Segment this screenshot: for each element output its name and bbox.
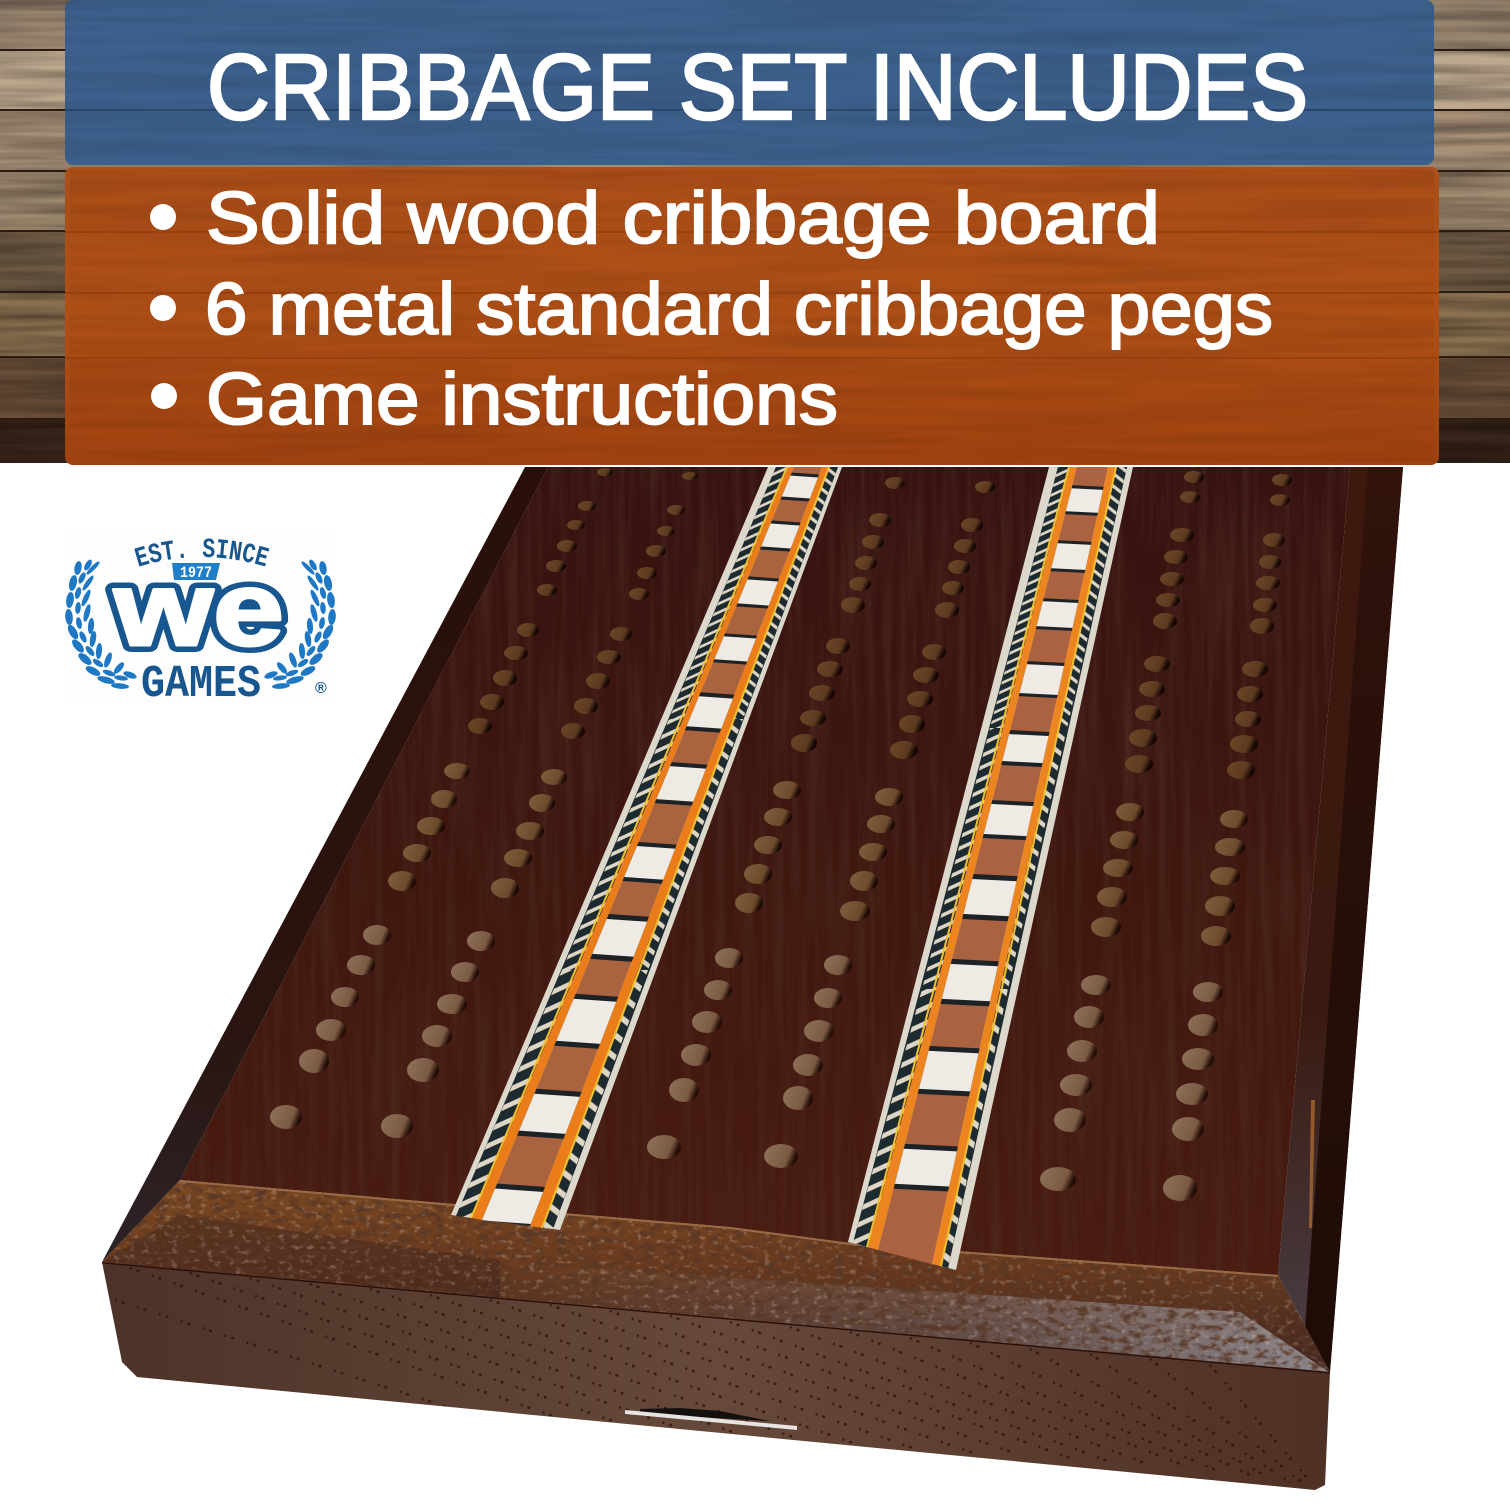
board: card slot on front face — [625, 1408, 797, 1430]
logo: laurel wreath — [65, 558, 336, 690]
board: top surface — [170, 467, 1360, 1282]
logo: we wordmark: we — [113, 551, 284, 668]
panel: orange contents list — [65, 167, 1439, 465]
list item: metal pegs: 6 metal standard cribbage pegs — [205, 269, 1273, 350]
logo: est. since arc text — [134, 538, 270, 566]
logo: est. since arc text: EST. SINCE — [134, 538, 270, 566]
cribbage board — [100, 467, 1403, 1492]
board: peg holes — [270, 468, 1292, 1201]
logo: WE Games — [65, 538, 336, 710]
background: wood planks — [0, 0, 1510, 463]
list item: game instructions: Game instructions — [206, 359, 838, 440]
logo: 1977 ribbon: 1977 — [180, 564, 212, 582]
logo: registered mark: ® — [315, 680, 327, 697]
panel: blue title banner — [65, 0, 1434, 165]
board: left inlay strip — [451, 466, 842, 1230]
board: left bevel — [102, 467, 548, 1262]
logo: games wordmark: GAMES — [141, 659, 261, 710]
board: front face — [100, 1260, 1335, 1492]
logo: we wordmark: we — [113, 551, 284, 668]
list item: solid wood cribbage board: Solid wood cribbage board — [206, 178, 1160, 259]
board: front bevel — [100, 1175, 1335, 1375]
board: right bevel — [1278, 467, 1403, 1372]
right inlay: chevron borders — [853, 467, 1127, 1268]
board: right inlay strip — [848, 466, 1133, 1270]
left inlay: chevron borders — [456, 467, 838, 1229]
title: CRIBBAGE SET INCLUDES — [207, 35, 1308, 139]
